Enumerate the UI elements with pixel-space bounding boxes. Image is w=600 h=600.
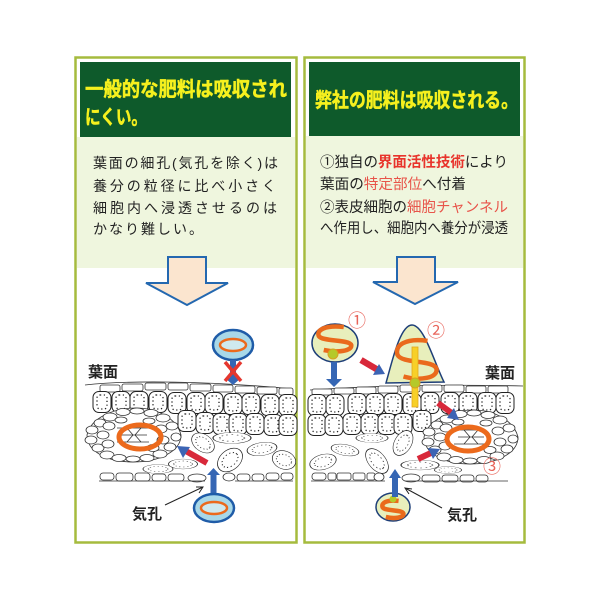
icon: bottom capsule entering	[194, 468, 234, 522]
label: stoma right: 気孔	[447, 506, 477, 524]
text block: our explanation: 葉面の特定部位へ付着	[320, 176, 466, 193]
arrow: red to bundle bottom	[418, 448, 440, 459]
panel: our fertilizer	[304, 58, 524, 542]
label: stoma right	[405, 488, 477, 524]
label: stoma left: 気孔	[132, 505, 162, 523]
lower epidermis	[311, 473, 508, 482]
label: stoma left	[132, 487, 203, 523]
icon: capsule 1	[312, 324, 358, 387]
label: leaf surface right: 葉面	[485, 365, 515, 382]
vascular bundle	[85, 408, 181, 462]
icon: top capsule blocked	[213, 330, 253, 385]
heading: general fertilizer	[80, 62, 291, 137]
number: circle 1: ①	[348, 311, 366, 331]
mesophyll cells	[143, 429, 298, 477]
diagram: leaf cross section right	[308, 385, 523, 482]
text block: our explanation: ①独自の界面活性技術により	[320, 154, 508, 171]
text block: general explanation: 細胞内へ浸透させるのは	[93, 200, 277, 216]
orange ring in bundle	[447, 427, 489, 451]
heading: our fertilizer	[309, 62, 520, 136]
arrow: red to mound	[361, 360, 385, 375]
mesophyll cells	[308, 427, 462, 478]
text block: our explanation: ②表皮細胞の細胞チャンネル	[320, 199, 508, 216]
diagram: leaf cross section left	[85, 382, 298, 482]
icon: bottom capsule with nutrient	[376, 469, 410, 521]
heading: general fertilizer: にくい。	[85, 107, 147, 129]
text block: our explanation: へ作用し、細胞内へ養分が浸透	[320, 219, 508, 237]
text block: general explanation: かなり難しい。	[93, 221, 203, 237]
text block: general explanation	[93, 155, 278, 237]
label: leaf surface left: 葉面	[88, 364, 118, 381]
text block: general explanation: 葉面の細孔(気孔を除く)は	[93, 155, 278, 171]
text block: general explanation: 養分の粒径に比べ小さく	[93, 178, 276, 194]
text block: our explanation	[320, 154, 508, 237]
number: circle 3: ③	[483, 457, 501, 477]
arrow: large down arrow right	[373, 257, 458, 304]
arrow: large down arrow left	[146, 257, 228, 305]
upper epidermis	[310, 385, 523, 395]
orange ring in bundle	[119, 425, 161, 449]
palisade cells	[93, 392, 297, 436]
upper epidermis	[85, 382, 293, 395]
arrow: red to bundle top	[438, 403, 459, 420]
lower epidermis	[99, 473, 293, 482]
heading: general fertilizer: 一般的な肥料は吸収され	[85, 78, 287, 101]
palisade cells	[308, 392, 514, 436]
panel: general fertilizer	[76, 58, 298, 542]
arrow: red to bundle	[177, 446, 207, 463]
vascular bundle	[422, 410, 518, 464]
number: circle 2: ②	[427, 321, 445, 341]
icon: mound with nutrient	[386, 325, 444, 407]
heading: our fertilizer: 弊社の肥料は吸収される。	[315, 89, 518, 112]
